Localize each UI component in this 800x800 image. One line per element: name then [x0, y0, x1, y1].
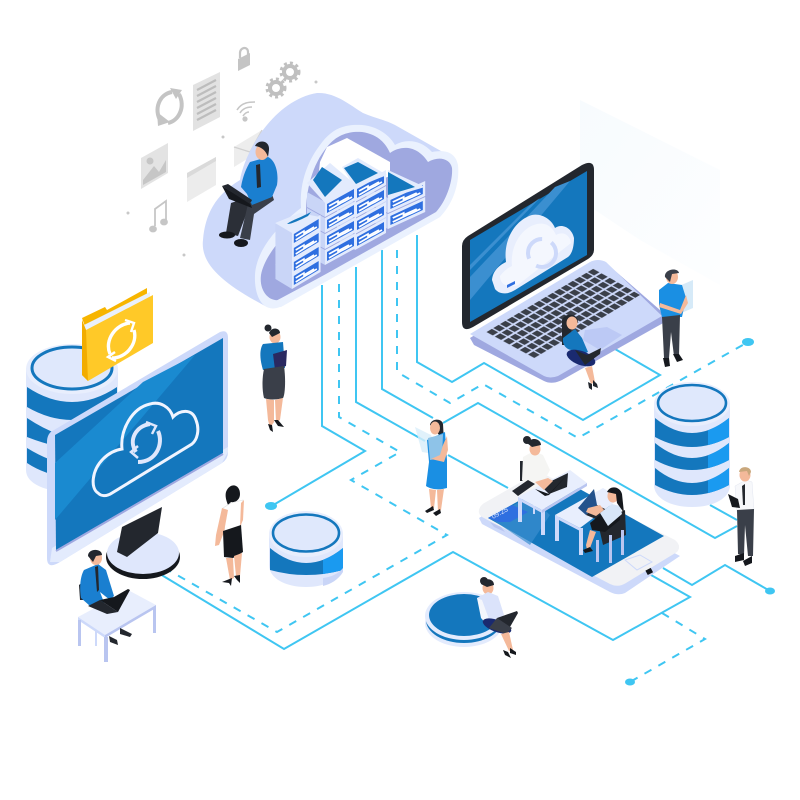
desk — [78, 590, 156, 662]
cloud bottom lip — [272, 212, 442, 307]
phone body — [479, 481, 680, 594]
laptop on desk two — [578, 489, 609, 519]
person on cloud — [219, 141, 278, 247]
server stack third — [337, 158, 387, 250]
standing woman from behind — [215, 485, 244, 586]
cloud rear body — [203, 93, 457, 307]
icon: lock — [238, 48, 250, 71]
server stack second — [307, 163, 356, 265]
server stack front — [275, 212, 321, 289]
icon: folder panel — [187, 157, 216, 202]
icon: music note — [150, 201, 167, 232]
phone screen — [488, 478, 664, 577]
man at desk — [78, 550, 156, 662]
connection lines — [160, 235, 770, 682]
laptop lid — [462, 163, 594, 329]
isometric cloud network illustration — [26, 46, 775, 686]
trackpad — [583, 327, 622, 350]
icon: cloud on laptop screen — [492, 215, 574, 293]
icon: photo — [141, 143, 168, 189]
database right — [654, 382, 730, 507]
desk two — [555, 488, 620, 555]
woman on laptop — [562, 315, 601, 390]
standing woman with book — [260, 324, 287, 432]
man with black folder — [728, 467, 754, 566]
keyboard — [485, 268, 640, 359]
floating grey icons — [126, 48, 318, 256]
small dots — [126, 80, 318, 256]
yellow sync folder — [82, 288, 153, 381]
smartphone with desks — [479, 436, 680, 594]
cloud front rim — [255, 125, 458, 308]
icon: cloud outline on screen — [93, 403, 198, 496]
monitor — [47, 331, 228, 565]
icon: sync arrows on folder — [108, 320, 135, 361]
small database centre — [269, 511, 343, 587]
woman on disc with laptop — [477, 577, 518, 658]
icon: sync — [157, 88, 182, 126]
laptop on desk one — [535, 473, 568, 496]
person at desk one — [512, 436, 550, 496]
man with glass panel — [659, 270, 693, 367]
monitor stand — [106, 507, 180, 579]
icon: document — [193, 72, 220, 131]
big database left — [26, 344, 118, 492]
cloud with servers — [203, 93, 458, 308]
icon: gears — [267, 63, 299, 97]
connector end dots — [265, 338, 775, 686]
icon: envelope — [234, 130, 262, 167]
server stack far right — [366, 170, 425, 229]
status text: 09:25 — [491, 506, 510, 521]
icon: wifi — [237, 102, 255, 121]
cloud interior — [261, 132, 452, 300]
icon: sync arrows on screen — [131, 422, 160, 462]
laptop — [462, 163, 665, 383]
person at desk two — [583, 487, 626, 563]
background glass panel — [580, 100, 720, 285]
white inner wall — [318, 138, 390, 195]
blue disc platform — [425, 592, 503, 647]
desk one — [518, 470, 587, 535]
woman with tablet — [415, 420, 448, 516]
laptop base — [470, 260, 665, 383]
